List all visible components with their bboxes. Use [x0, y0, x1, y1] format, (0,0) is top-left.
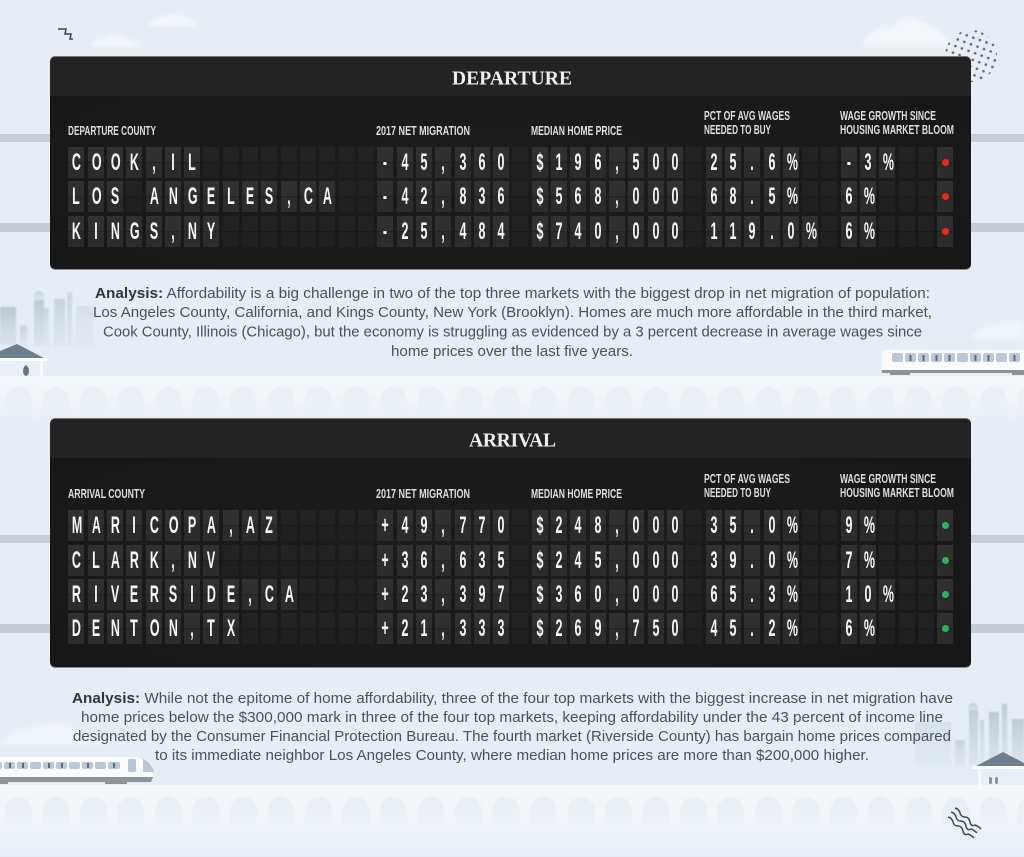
row: Los Angeles, CA: 5 — [556, 183, 563, 210]
row: Maricopa, AZ: 9 — [420, 512, 427, 539]
row: Maricopa, AZ: 0 — [672, 512, 678, 539]
row: Cook, IL: 6 — [594, 149, 601, 176]
row: Clark, NV: 5 — [498, 546, 505, 574]
row: Cook, IL: L — [188, 149, 196, 176]
row: Los Angeles, CA: 2 — [420, 183, 427, 210]
icon: train left — [0, 757, 154, 784]
row: Los Angeles, CA: 3 — [478, 183, 485, 210]
row: Riverside, CA: 5 — [729, 581, 736, 608]
row: Kings, NY: $ — [536, 218, 543, 245]
row: Kings, NY: 4 — [498, 218, 505, 245]
row: Los Angeles, CA: G — [188, 183, 198, 210]
row: Kings, NY: 2 — [401, 218, 408, 245]
row: Maricopa, AZ: R — [111, 512, 120, 539]
row: Denton, TX: % — [864, 615, 875, 642]
row: Clark, NV: K — [149, 546, 158, 574]
row: Denton, TX: 2 — [768, 615, 775, 642]
column headings: PCT OF AVG WAGES — [704, 108, 790, 123]
row: Maricopa, AZ: % — [787, 512, 798, 539]
row: Denton, TX: + — [382, 615, 389, 642]
row: Riverside, CA: , — [441, 581, 445, 608]
row: Cook, IL: 6 — [478, 149, 485, 176]
analysis: arrival: home prices below the $300,000 mark in three of the four top markets, keeping affordability under the 43 percent of income line — [81, 709, 943, 726]
panel: departure board — [50, 57, 970, 269]
rails — [0, 134, 1024, 633]
row: Kings, NY: 0 — [633, 218, 640, 245]
row: Clark, NV: 3 — [710, 546, 717, 574]
row: Kings, NY: , — [615, 218, 619, 245]
row: Cook, IL: % — [883, 149, 894, 176]
analysis: departure: Analysis: Affordability is a big challenge in two of the top three markets with the biggest drop in net migration of population: — [95, 285, 930, 302]
row: Maricopa, AZ: + — [382, 512, 389, 539]
row: Maricopa, AZ: A — [246, 512, 255, 539]
row: Los Angeles, CA: $ — [536, 183, 543, 210]
row: Maricopa, AZ: M — [72, 512, 83, 539]
row: Cook, IL: 5 — [633, 149, 640, 176]
row: Maricopa, AZ: 7 — [478, 512, 485, 539]
row: Clark, NV: $ — [536, 546, 543, 574]
row: Riverside, CA: . — [750, 581, 754, 608]
row: Los Angeles, CA: . — [750, 183, 754, 210]
row: Los Angeles, CA: , — [615, 183, 619, 210]
row: Cook, IL: 6 — [768, 149, 775, 176]
column headings: ARRIVAL COUNTY — [68, 486, 145, 501]
row: Denton, TX: O — [149, 615, 159, 642]
row: Riverside, CA: I — [190, 581, 194, 608]
row: Kings, NY: 0 — [594, 218, 601, 245]
row: Los Angeles, CA: - — [383, 183, 387, 210]
row: Riverside, CA: R — [72, 581, 81, 608]
row: Cook, IL: C — [72, 149, 81, 176]
row: Kings, NY: , — [171, 218, 175, 245]
icon: station right — [972, 752, 1024, 785]
row: Denton, TX: $ — [536, 615, 543, 642]
row: Los Angeles, CA: 6 — [710, 183, 717, 210]
row: Maricopa, AZ: 5 — [729, 512, 736, 539]
panel: arrival board — [50, 419, 970, 666]
row: Clark, NV: , — [441, 546, 445, 574]
row: Kings, NY — [68, 216, 953, 247]
row: Maricopa, AZ: 0 — [768, 512, 775, 539]
row: Cook, IL: , — [615, 149, 619, 176]
row: Maricopa, AZ: $ — [536, 512, 543, 539]
row: Maricopa, AZ: A — [91, 512, 100, 539]
row: Los Angeles, CA: 5 — [768, 183, 775, 210]
row: Riverside, CA: 6 — [575, 581, 582, 608]
row: Cook, IL: 9 — [575, 149, 582, 176]
row: Riverside, CA: 0 — [594, 581, 601, 608]
row: Los Angeles, CA: S — [111, 183, 119, 210]
row: Maricopa, AZ: I — [132, 512, 136, 539]
column headings — [68, 471, 954, 501]
header strip — [50, 419, 970, 458]
row: Riverside, CA: I — [94, 581, 97, 608]
skyline right — [915, 703, 1024, 766]
row: Kings, NY: 8 — [478, 218, 485, 245]
analysis: departure: home prices over the last five years. — [391, 343, 633, 360]
row: Clark, NV: C — [72, 546, 81, 574]
row: Los Angeles, CA: E — [207, 183, 216, 210]
row: Riverside, CA: 0 — [672, 581, 678, 608]
row: Cook, IL: K — [130, 149, 139, 176]
row: Riverside, CA: 0 — [652, 581, 659, 608]
row: Clark, NV: A — [111, 546, 120, 574]
row: Maricopa, AZ: 7 — [459, 512, 466, 539]
row: Los Angeles, CA — [68, 181, 953, 212]
row: Denton, TX: X — [227, 615, 235, 642]
row: Riverside, CA: D — [207, 581, 216, 608]
row: Denton, TX: T — [208, 615, 215, 642]
row: Riverside, CA: 1 — [845, 581, 852, 608]
row: Denton, TX: 3 — [478, 615, 485, 642]
row: Riverside, CA: 6 — [710, 581, 717, 608]
row: Maricopa, AZ: , — [229, 512, 233, 539]
row: Maricopa, AZ: 3 — [710, 512, 717, 539]
row: Clark, NV: R — [130, 546, 139, 574]
row: Cook, IL: 5 — [420, 149, 427, 176]
row: Maricopa, AZ: Z — [266, 512, 273, 539]
row: Denton, TX: , — [190, 615, 194, 642]
row: Clark, NV: 0 — [768, 546, 775, 574]
row: Kings, NY: , — [441, 218, 445, 245]
column headings: MEDIAN HOME PRICE — [531, 123, 622, 138]
row: Riverside, CA: V — [111, 581, 119, 608]
row: Maricopa, AZ — [68, 510, 953, 541]
row: Kings, NY: Y — [207, 218, 216, 245]
row: Kings, NY: . — [770, 218, 773, 245]
row: Clark, NV: 3 — [478, 546, 485, 574]
row: Denton, TX: % — [787, 615, 798, 642]
row: Kings, NY: 5 — [420, 218, 427, 245]
row: Riverside, CA: % — [883, 581, 894, 608]
analysis: arrival: Analysis: While not the epitome of home affordability, three of the four top markets with the biggest increase in net migration have — [72, 690, 953, 707]
row: Kings, NY: 0 — [787, 218, 794, 245]
column headings: PCT OF AVG WAGES — [704, 471, 790, 486]
row: Los Angeles, CA: N — [169, 183, 178, 210]
row: Kings, NY: - — [383, 218, 387, 245]
row: Los Angeles, CA: 0 — [672, 183, 678, 210]
row: Cook, IL: , — [152, 149, 155, 176]
row: Cook, IL: 1 — [556, 149, 563, 176]
row: Denton, TX: 2 — [401, 615, 408, 642]
row: Los Angeles, CA: 0 — [633, 183, 640, 210]
row: Clark, NV: + — [382, 546, 389, 574]
row: Maricopa, AZ: 0 — [652, 512, 659, 539]
row: Kings, NY: 1 — [729, 218, 736, 245]
row: Clark, NV: 3 — [401, 546, 408, 574]
row: Cook, IL: % — [787, 149, 798, 176]
row: Riverside, CA: 0 — [633, 581, 640, 608]
row: Riverside, CA: 3 — [556, 581, 563, 608]
row: Kings, NY: N — [111, 218, 120, 245]
row: Denton, TX: . — [750, 615, 754, 642]
analysis: arrival: designated by the Consumer Financial Protection Bureau. The fourth market (Riverside County) has bargain home prices compared — [73, 728, 951, 745]
row: Maricopa, AZ: 4 — [401, 512, 408, 539]
row: Cook, IL: , — [441, 149, 445, 176]
row: Denton, TX: D — [72, 615, 81, 642]
row: Riverside, CA — [68, 579, 953, 610]
header strip — [50, 57, 970, 96]
column headings: 2017 NET MIGRATION — [376, 123, 470, 138]
row: Clark, NV: 0 — [672, 546, 678, 574]
row: Denton, TX: E — [91, 615, 100, 642]
row: Los Angeles, CA: 6 — [575, 183, 582, 210]
row: Denton, TX: 7 — [633, 615, 640, 642]
row: Maricopa, AZ: 0 — [498, 512, 505, 539]
row: Riverside, CA: , — [248, 581, 252, 608]
row: Los Angeles, CA: 6 — [498, 183, 505, 210]
row: Riverside, CA: $ — [536, 581, 543, 608]
analysis: departure: Cook County, Illinois (Chicago), but the economy is struggling as evidenced by a 3 percent decrease in average wages since — [103, 324, 922, 340]
row: Kings, NY: % — [806, 218, 817, 245]
row: Kings, NY: 6 — [845, 218, 852, 245]
row: Los Angeles, CA: S — [265, 183, 274, 210]
row: Los Angeles, CA: , — [287, 183, 290, 210]
row: Kings, NY: K — [72, 218, 81, 245]
row: Cook, IL: 2 — [710, 149, 717, 176]
row: Riverside, CA: E — [227, 581, 235, 608]
row: Maricopa, AZ: 4 — [575, 512, 582, 539]
row: Maricopa, AZ: A — [207, 512, 216, 539]
board headings — [68, 430, 954, 501]
row: Los Angeles, CA: O — [91, 183, 101, 210]
row: Denton, TX: T — [130, 615, 138, 642]
column headings — [68, 108, 954, 138]
row: Maricopa, AZ: P — [188, 512, 196, 539]
skyline left — [0, 291, 93, 346]
row: Denton, TX: , — [615, 615, 619, 642]
row: Denton, TX: 5 — [652, 615, 659, 642]
row: Riverside, CA: , — [615, 581, 619, 608]
row: Denton, TX: N — [169, 615, 178, 642]
row: Riverside, CA: 0 — [865, 581, 872, 608]
analysis: departure — [93, 285, 932, 360]
row: Cook, IL: 5 — [729, 149, 736, 176]
row: Kings, NY: 7 — [556, 218, 563, 245]
row: Clark, NV: N — [188, 546, 197, 574]
row: Clark, NV: 2 — [556, 546, 563, 574]
row: Kings, NY: 9 — [749, 218, 756, 245]
row: Los Angeles, CA: 8 — [729, 183, 736, 210]
row: Clark, NV: 7 — [845, 546, 852, 574]
row: Cook, IL: 3 — [459, 149, 466, 176]
column headings: MEDIAN HOME PRICE — [531, 486, 622, 501]
row: Los Angeles, CA: 8 — [594, 183, 601, 210]
row: Clark, NV — [68, 545, 953, 576]
row: Cook, IL: - — [847, 149, 851, 176]
row: Clark, NV: , — [615, 546, 619, 574]
analysis: arrival — [72, 690, 953, 764]
title: departure: DEPARTURE — [452, 68, 572, 90]
row: Riverside, CA: E — [130, 581, 138, 608]
row: Kings, NY: N — [188, 218, 197, 245]
row: Kings, NY: 4 — [575, 218, 582, 245]
row: Cook, IL — [68, 147, 953, 178]
row: Riverside, CA: 7 — [498, 581, 505, 608]
row: Clark, NV: 0 — [633, 546, 640, 574]
row: Los Angeles, CA: 4 — [401, 183, 408, 210]
row: Kings, NY: % — [864, 218, 875, 245]
row: Denton, TX: , — [441, 615, 445, 642]
row: Maricopa, AZ: 8 — [594, 512, 601, 539]
board headings — [68, 68, 954, 138]
row: Los Angeles, CA: % — [864, 183, 875, 210]
row: Kings, NY: 0 — [672, 218, 678, 245]
row: Clark, NV: 9 — [729, 546, 736, 574]
row: Los Angeles, CA: L — [72, 183, 80, 210]
row: Cook, IL: I — [171, 149, 175, 176]
row: Riverside, CA: 2 — [401, 581, 408, 608]
row: Denton, TX: 4 — [710, 615, 717, 642]
row: Cook, IL: . — [750, 149, 754, 176]
row: Clark, NV: 5 — [594, 546, 601, 574]
analysis: departure: Los Angeles County, California, and Kings County, New York (Brooklyn). Homes are much more affordable in the third market, — [93, 304, 932, 321]
row: Los Angeles, CA: C — [304, 183, 313, 210]
row: Riverside, CA: + — [382, 581, 389, 608]
row: Kings, NY: G — [130, 218, 140, 245]
row: Maricopa, AZ: , — [615, 512, 619, 539]
row: Los Angeles, CA: % — [787, 183, 798, 210]
row: Kings, NY: 1 — [710, 218, 717, 245]
row: Riverside, CA: R — [149, 581, 158, 608]
row: Maricopa, AZ: C — [149, 512, 158, 539]
row: Riverside, CA: S — [169, 581, 177, 608]
row: Los Angeles, CA: A — [149, 183, 158, 210]
row: Riverside, CA: 3 — [459, 581, 466, 608]
row: Cook, IL: 0 — [498, 149, 505, 176]
row: Clark, NV: 6 — [459, 546, 466, 574]
icon: squiggles — [948, 808, 981, 838]
row: Cook, IL: 0 — [672, 149, 678, 176]
row: Clark, NV: % — [787, 546, 798, 574]
row: Denton, TX: 9 — [594, 615, 601, 642]
row: Los Angeles, CA: , — [441, 183, 445, 210]
row: Los Angeles, CA: L — [227, 183, 235, 210]
row: Cook, IL: $ — [536, 149, 543, 176]
row: Clark, NV: V — [207, 546, 216, 574]
row: Denton, TX: 0 — [672, 615, 678, 642]
row: Maricopa, AZ: % — [864, 512, 875, 539]
row: Clark, NV: . — [750, 546, 754, 574]
row: Riverside, CA: A — [285, 581, 294, 608]
row: Cook, IL: 3 — [865, 149, 872, 176]
row: Clark, NV: , — [171, 546, 175, 574]
row: Kings, NY: S — [149, 218, 158, 245]
row: Denton, TX: 6 — [845, 615, 852, 642]
icon: station left — [0, 344, 47, 376]
row: Kings, NY: 4 — [459, 218, 466, 245]
row: Los Angeles, CA: 6 — [845, 183, 852, 210]
row: Clark, NV: 4 — [575, 546, 582, 574]
row: Denton, TX — [68, 613, 953, 644]
row: Los Angeles, CA: A — [323, 183, 332, 210]
row: Cook, IL: 0 — [652, 149, 659, 176]
row: Cook, IL: O — [91, 149, 101, 176]
row: Riverside, CA: C — [265, 581, 274, 608]
row: Denton, TX: 6 — [575, 615, 582, 642]
row: Riverside, CA: % — [787, 581, 798, 608]
column headings: NEEDED TO BUY — [704, 485, 771, 500]
bridge upper — [0, 376, 1024, 422]
row: Los Angeles, CA: 0 — [652, 183, 659, 210]
row: Clark, NV: L — [92, 546, 99, 574]
row: Riverside, CA: 9 — [478, 581, 485, 608]
row: Denton, TX: 2 — [556, 615, 563, 642]
row: Denton, TX: 3 — [459, 615, 466, 642]
row: Clark, NV: % — [864, 546, 875, 574]
row: Kings, NY: 0 — [652, 218, 659, 245]
row: Maricopa, AZ: 0 — [633, 512, 640, 539]
row: Cook, IL: 4 — [401, 149, 408, 176]
title: arrival: ARRIVAL — [469, 430, 556, 452]
row: Los Angeles, CA: 8 — [459, 183, 466, 210]
icon: train right — [882, 350, 1024, 375]
row: Kings, NY: I — [94, 218, 97, 245]
row: Maricopa, AZ: . — [750, 512, 754, 539]
analysis: arrival: to its immediate neighbor Los Angeles County, where median home prices are more than $200,000 higher. — [155, 747, 869, 764]
column headings: 2017 NET MIGRATION — [376, 486, 470, 501]
icon: dot circle — [945, 30, 997, 82]
bridge lower — [0, 785, 1024, 857]
row: Cook, IL: O — [111, 149, 120, 176]
row: Riverside, CA: 3 — [768, 581, 775, 608]
row: Riverside, CA: 3 — [420, 581, 427, 608]
row: Clark, NV: 0 — [652, 546, 659, 574]
row: Maricopa, AZ: 9 — [845, 512, 852, 539]
column headings: DEPARTURE COUNTY — [68, 123, 156, 138]
row: Maricopa, AZ: , — [441, 512, 445, 539]
row: Denton, TX: 3 — [498, 615, 505, 642]
row: Cook, IL: - — [383, 149, 387, 176]
row: Denton, TX: 1 — [420, 615, 427, 642]
row: Clark, NV: 6 — [420, 546, 427, 574]
row: Denton, TX: N — [111, 615, 120, 642]
column headings: NEEDED TO BUY — [704, 122, 771, 137]
row: Los Angeles, CA: E — [246, 183, 254, 210]
row: Maricopa, AZ: O — [169, 512, 178, 539]
row: Maricopa, AZ: 2 — [556, 512, 563, 539]
row: Denton, TX: 5 — [729, 615, 736, 642]
icon: zigzag — [58, 29, 73, 39]
